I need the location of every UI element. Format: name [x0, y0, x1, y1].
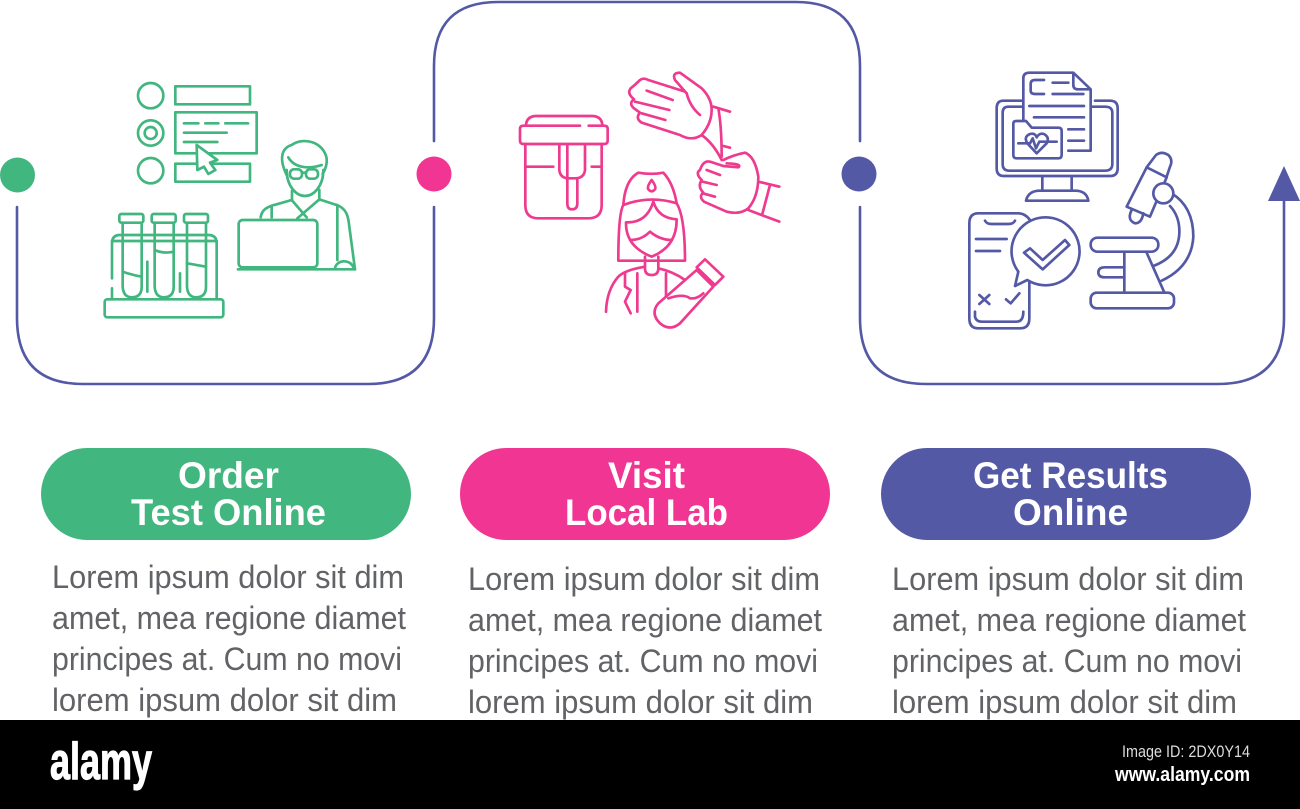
process frame line: [17, 2, 1284, 384]
pill: visit local lab: [460, 448, 830, 540]
text block: step 3: amet, mea regione diamet: [892, 602, 1246, 638]
text block: step 1: lorem ipsum dolor sit dim: [52, 682, 397, 718]
pill: visit local lab: Local Lab: [565, 492, 728, 533]
text block: step 3: Lorem ipsum dolor sit dim: [892, 561, 1244, 597]
pill: order test online: Test Online: [131, 492, 326, 533]
pill: get results online: [881, 448, 1251, 540]
text block: step 1: Lorem ipsum dolor sit dim: [52, 559, 404, 595]
step dot: blue: [842, 156, 876, 192]
text block: step 2: amet, mea regione diamet: [468, 602, 822, 638]
step dot: green: [0, 158, 35, 192]
text block: step 3: lorem ipsum dolor sit dim: [892, 684, 1237, 720]
icon: online results and microscope: [969, 73, 1193, 328]
footer url: www.alamy.com: [1114, 764, 1250, 786]
icon: online order and test tubes: [105, 83, 355, 317]
footer band: [0, 720, 1300, 809]
pill: order test online: Order: [178, 455, 279, 496]
step dot: pink: [416, 156, 452, 192]
text block: step 3: [892, 561, 1246, 720]
text block: step 1: [52, 559, 406, 718]
pill: visit local lab: Visit: [608, 455, 685, 496]
footer logo: alamy: [50, 733, 152, 791]
pill: get results online: Get Results: [973, 455, 1168, 496]
text block: step 1: amet, mea regione diamet: [52, 600, 406, 636]
icon: lab visit with nurse and specimen cup: [520, 73, 779, 327]
arrowhead: [1268, 166, 1300, 201]
pill: get results online: Online: [1013, 492, 1128, 533]
text block: step 2: [468, 561, 822, 720]
pill: order test online: [41, 448, 411, 540]
text block: step 2: Lorem ipsum dolor sit dim: [468, 561, 820, 597]
text block: step 2: principes at. Cum no movi: [468, 643, 818, 679]
footer image id: Image ID: 2DX0Y14: [1122, 742, 1250, 761]
text block: step 3: principes at. Cum no movi: [892, 643, 1242, 679]
text block: step 1: principes at. Cum no movi: [52, 641, 402, 677]
text block: step 2: lorem ipsum dolor sit dim: [468, 684, 813, 720]
